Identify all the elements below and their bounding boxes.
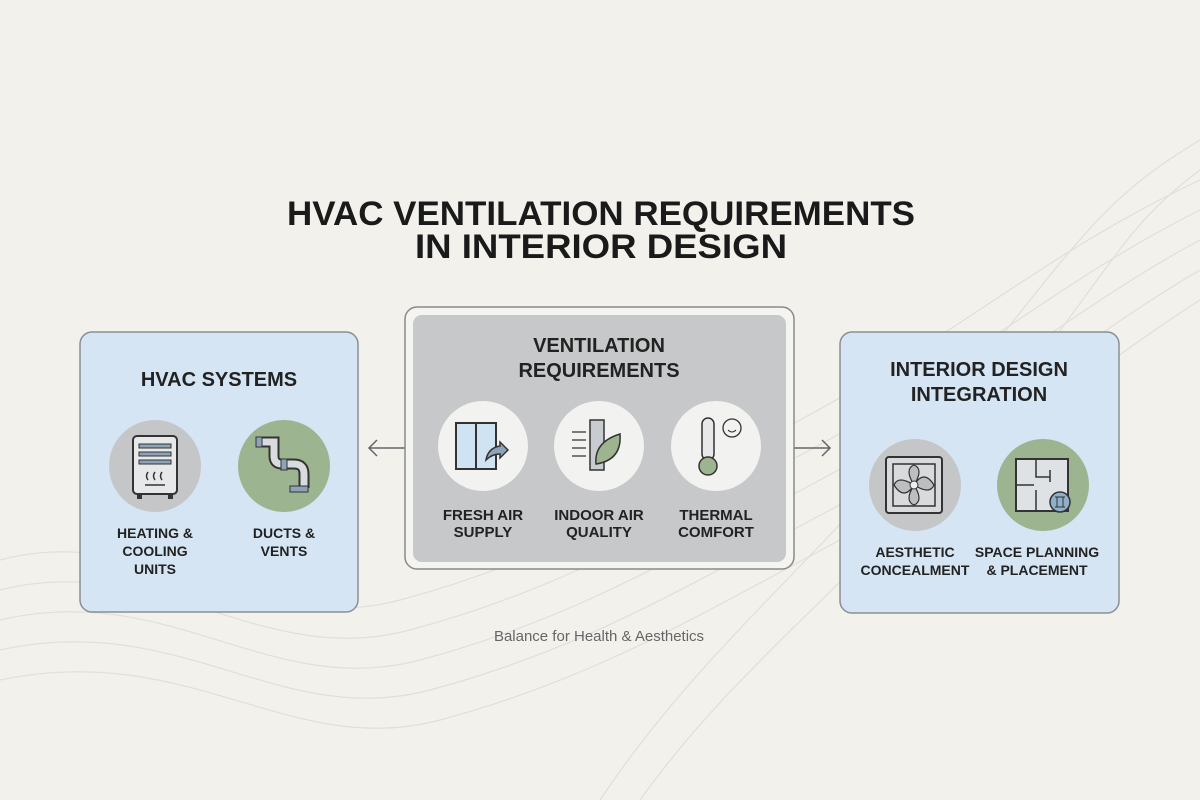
labels: ventilation items: FRESH AIR (443, 507, 523, 524)
labels: integration items: CONCEALMENT (861, 562, 970, 578)
labels: ventilation items: COMFORT (678, 524, 754, 541)
heading: interior design integration: INTEGRATION (911, 384, 1047, 406)
label: ducts & vents: DUCTS & (253, 525, 315, 541)
title: IN INTERIOR DESIGN (415, 228, 787, 266)
heading: ventilation requirements: VENTILATION (533, 335, 665, 357)
icon: floor plan (997, 439, 1089, 531)
title: HVAC VENTILATION REQUIREMENTS (287, 195, 915, 233)
label: heating & cooling units: COOLING (122, 543, 188, 559)
labels: ventilation items: SUPPLY (454, 524, 512, 541)
footer caption: Balance for Health & Aesthetics (494, 628, 704, 645)
arrow: left (369, 440, 413, 456)
labels: integration items: SPACE PLANNING (975, 544, 1099, 560)
icon: decorative vent (869, 439, 961, 531)
icon: ducts (238, 420, 330, 512)
panel: hvac systems (80, 332, 358, 612)
heading: hvac systems: HVAC SYSTEMS (141, 369, 297, 391)
title (287, 195, 915, 266)
panel: ventilation requirements (405, 307, 794, 569)
icon: air quality filter (554, 401, 644, 491)
icon: heating unit (109, 420, 201, 512)
labels: ventilation items: QUALITY (566, 524, 632, 541)
labels: ventilation items: THERMAL (679, 507, 753, 524)
label: heating & cooling units: UNITS (134, 561, 176, 577)
heading: interior design integration: INTERIOR DESIGN (890, 359, 1068, 381)
icon: fresh air window (438, 401, 528, 491)
panel: interior design integration (840, 332, 1119, 613)
icon: thermal comfort (671, 401, 761, 491)
label: ducts & vents: VENTS (261, 543, 307, 559)
labels: integration items: & PLACEMENT (986, 562, 1088, 578)
arrow: right (787, 440, 830, 456)
labels: ventilation items: INDOOR AIR (554, 507, 644, 524)
labels: integration items: AESTHETIC (875, 544, 955, 560)
label: heating & cooling units: HEATING & (117, 525, 193, 541)
heading: ventilation requirements: REQUIREMENTS (518, 360, 680, 382)
